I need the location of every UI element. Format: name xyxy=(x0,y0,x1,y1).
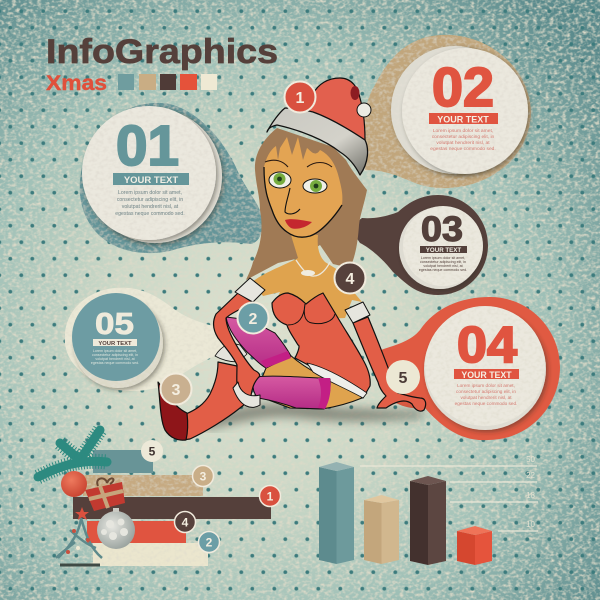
panel 02 xyxy=(362,35,531,188)
panel 05 xyxy=(65,288,240,391)
panel 01 xyxy=(80,103,263,253)
bar marker 5 xyxy=(141,440,163,462)
panel 04 xyxy=(375,297,560,440)
upper stocking xyxy=(226,317,291,368)
body text 03: consectetur adipiscing elit, in xyxy=(420,260,466,264)
upper stocking top xyxy=(261,351,291,368)
bar 5 xyxy=(93,450,153,473)
body text 05: Lorem ipsum dolor sit amet, xyxy=(93,349,137,353)
body text 03: Lorem ipsum dolor sit amet, xyxy=(421,256,465,260)
marker 1 xyxy=(284,82,316,112)
label bar 05: YOUR TEXT xyxy=(98,341,132,347)
body text 02: volutpat hendrerit nisl, at xyxy=(436,140,490,146)
under disc 04 xyxy=(424,308,546,430)
body text 05: consectetur adipiscing elit, in xyxy=(92,353,138,357)
body text 02: consectetur adipiscing elit, in xyxy=(432,134,495,140)
santa hat xyxy=(290,78,365,140)
body text 02: egestas neque commodo sed. xyxy=(430,146,496,152)
right eye xyxy=(303,179,327,193)
label bar 02 xyxy=(429,113,498,124)
tan blob behind panel 02 xyxy=(362,35,531,188)
label bar 01 xyxy=(113,173,189,186)
hat band xyxy=(267,108,368,175)
column 4 xyxy=(457,526,492,565)
label bar 05 xyxy=(93,339,137,347)
teal blob behind panel 01 xyxy=(80,103,263,253)
bar marker 2: 2 xyxy=(206,536,213,550)
main disc 02 xyxy=(402,48,528,174)
marker 5: 5 xyxy=(399,370,408,387)
body text 05: volutpat hendrerit nisl, at xyxy=(95,357,135,361)
number 01: 01 xyxy=(116,114,179,178)
marker 3 xyxy=(160,374,192,404)
bar marker 4 xyxy=(174,512,196,532)
marker 5 xyxy=(386,360,420,394)
eyebrows xyxy=(265,160,332,167)
main disc 03 xyxy=(403,206,483,286)
face xyxy=(264,137,342,237)
bar marker 1: 1 xyxy=(267,490,274,504)
body text 01: Lorem ipsum dolor sit amet, xyxy=(118,190,182,196)
label bar 02: YOUR TEXT xyxy=(437,114,489,124)
marker 4: 4 xyxy=(346,271,355,288)
right wrist cuff xyxy=(345,302,370,323)
number 04: 04 xyxy=(457,316,518,373)
main disc 01 xyxy=(82,106,216,240)
bar marker 2 xyxy=(198,532,220,552)
left eye xyxy=(269,172,291,188)
panel 03 xyxy=(354,195,488,295)
body text 01: volutpat hendrerit nisl, at xyxy=(122,204,179,210)
bar marker 4: 4 xyxy=(182,516,189,530)
number 05: 05 xyxy=(95,306,134,341)
body text 01: consectetur adipiscing elit, in xyxy=(117,197,183,203)
left leg xyxy=(182,362,250,440)
colour swatches xyxy=(118,74,217,90)
lower stocking xyxy=(253,376,330,409)
value labels xyxy=(526,455,536,529)
fir branch decoration xyxy=(38,430,107,477)
column 3 xyxy=(410,476,446,565)
character: santa girl xyxy=(158,78,426,440)
red blob behind panel 04 xyxy=(375,297,560,440)
left arm glove xyxy=(214,293,260,401)
body text 05: egestas neque commodo sed. xyxy=(91,361,139,365)
left wrist cuff xyxy=(235,278,265,302)
under disc 03 xyxy=(399,207,481,289)
number 03: 03 xyxy=(421,210,463,249)
lower stocking top xyxy=(318,378,331,409)
red ornament xyxy=(61,471,87,497)
subtitle: Xmas: Xmas xyxy=(46,72,107,95)
body text 04: Lorem ipsum dolor sit amet, xyxy=(457,383,515,388)
necklace pendant xyxy=(301,270,315,276)
label bar 01: YOUR TEXT xyxy=(124,175,178,186)
body text 04: consectetur adipiscing elit, in xyxy=(456,389,516,394)
column 2 xyxy=(364,495,399,564)
marker 1: 1 xyxy=(296,90,305,107)
body text 04: egestas neque commodo sed. xyxy=(455,401,517,406)
value lines xyxy=(360,466,538,531)
silver ornament xyxy=(97,508,135,549)
bar marker 1 xyxy=(260,486,280,506)
neck and chest skin xyxy=(252,232,362,320)
value labels: 22 xyxy=(526,471,536,480)
bar marker 5: 5 xyxy=(149,444,156,458)
face outline xyxy=(264,167,342,237)
nose xyxy=(285,188,300,214)
bottom wrist cuff xyxy=(233,382,260,407)
label bar 03: YOUR TEXT xyxy=(426,247,461,254)
bar marker 3: 3 xyxy=(200,470,207,484)
main disc 04 xyxy=(425,306,545,426)
thigh skin xyxy=(255,355,362,409)
under disc 05 xyxy=(73,298,163,388)
bar 1 xyxy=(73,497,271,519)
body text 04: volutpat hendrerit nisl, at xyxy=(460,395,512,400)
body text 03: volutpat hendrerit nisl, at xyxy=(423,264,463,268)
brown blob behind panel 03 xyxy=(354,195,488,295)
small tree decoration xyxy=(56,507,102,565)
title: InfoGraphics xyxy=(46,33,278,71)
bust line xyxy=(288,304,335,325)
marker 3: 3 xyxy=(172,382,181,399)
marker 2: 2 xyxy=(249,311,258,328)
hair back xyxy=(246,128,367,280)
label bar 04: YOUR TEXT xyxy=(461,370,512,380)
marker 2 xyxy=(238,302,268,334)
under disc 01 xyxy=(88,109,222,243)
lips xyxy=(285,219,312,229)
bar marker 3 xyxy=(192,466,214,486)
knee cuff xyxy=(215,344,247,362)
marker 4 xyxy=(334,262,366,294)
bar 4 xyxy=(87,521,186,543)
body text 02: Lorem ipsum dolor sit amet, xyxy=(433,128,493,134)
dress xyxy=(272,293,370,398)
column 1 xyxy=(319,462,354,564)
dress hem xyxy=(307,363,367,398)
necklace xyxy=(296,260,330,276)
hat pompom xyxy=(357,103,371,117)
cream blob behind panel 05 xyxy=(65,288,240,391)
value labels: 10 xyxy=(526,520,536,529)
main disc 05 xyxy=(72,293,160,381)
hat tip xyxy=(350,86,360,100)
3D column chart xyxy=(319,455,538,565)
right arm glove xyxy=(353,317,426,411)
value labels: 50 xyxy=(526,455,536,464)
ground shadow xyxy=(205,403,425,430)
horizontal bar chart xyxy=(73,440,280,566)
body text 01: egestas neque commodo sed. xyxy=(115,211,185,217)
shoe xyxy=(158,382,188,440)
body text 03: egestas neque commodo sed. xyxy=(419,268,467,272)
under disc 02 xyxy=(391,46,519,174)
gift box xyxy=(85,478,125,511)
bar 2 xyxy=(93,543,208,566)
number 02: 02 xyxy=(432,56,494,118)
bar 3 xyxy=(83,475,203,496)
value labels: 18 xyxy=(526,491,536,500)
